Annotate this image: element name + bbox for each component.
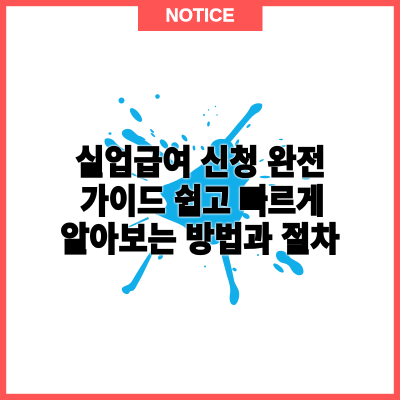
title line 1: 실업급여 신청 완전 (76, 135, 326, 184)
icon: blue paint splash (104, 94, 310, 305)
top right streak (224, 103, 262, 145)
title line 2: 가이드 쉽고 빠르게 (80, 174, 324, 223)
upper left streak (122, 129, 175, 166)
title line 3: 알아보는 방법과 절차 (60, 212, 340, 261)
lower left streak (122, 251, 153, 294)
lower right double drop (276, 251, 303, 275)
left streak (104, 138, 130, 155)
bottom streak and drop (219, 240, 239, 305)
central blob (154, 139, 250, 245)
title (60, 135, 340, 261)
splash droplets (108, 94, 310, 274)
badge background (138, 0, 262, 31)
notice badge (138, 0, 262, 31)
badge label: NOTICE (166, 4, 234, 26)
